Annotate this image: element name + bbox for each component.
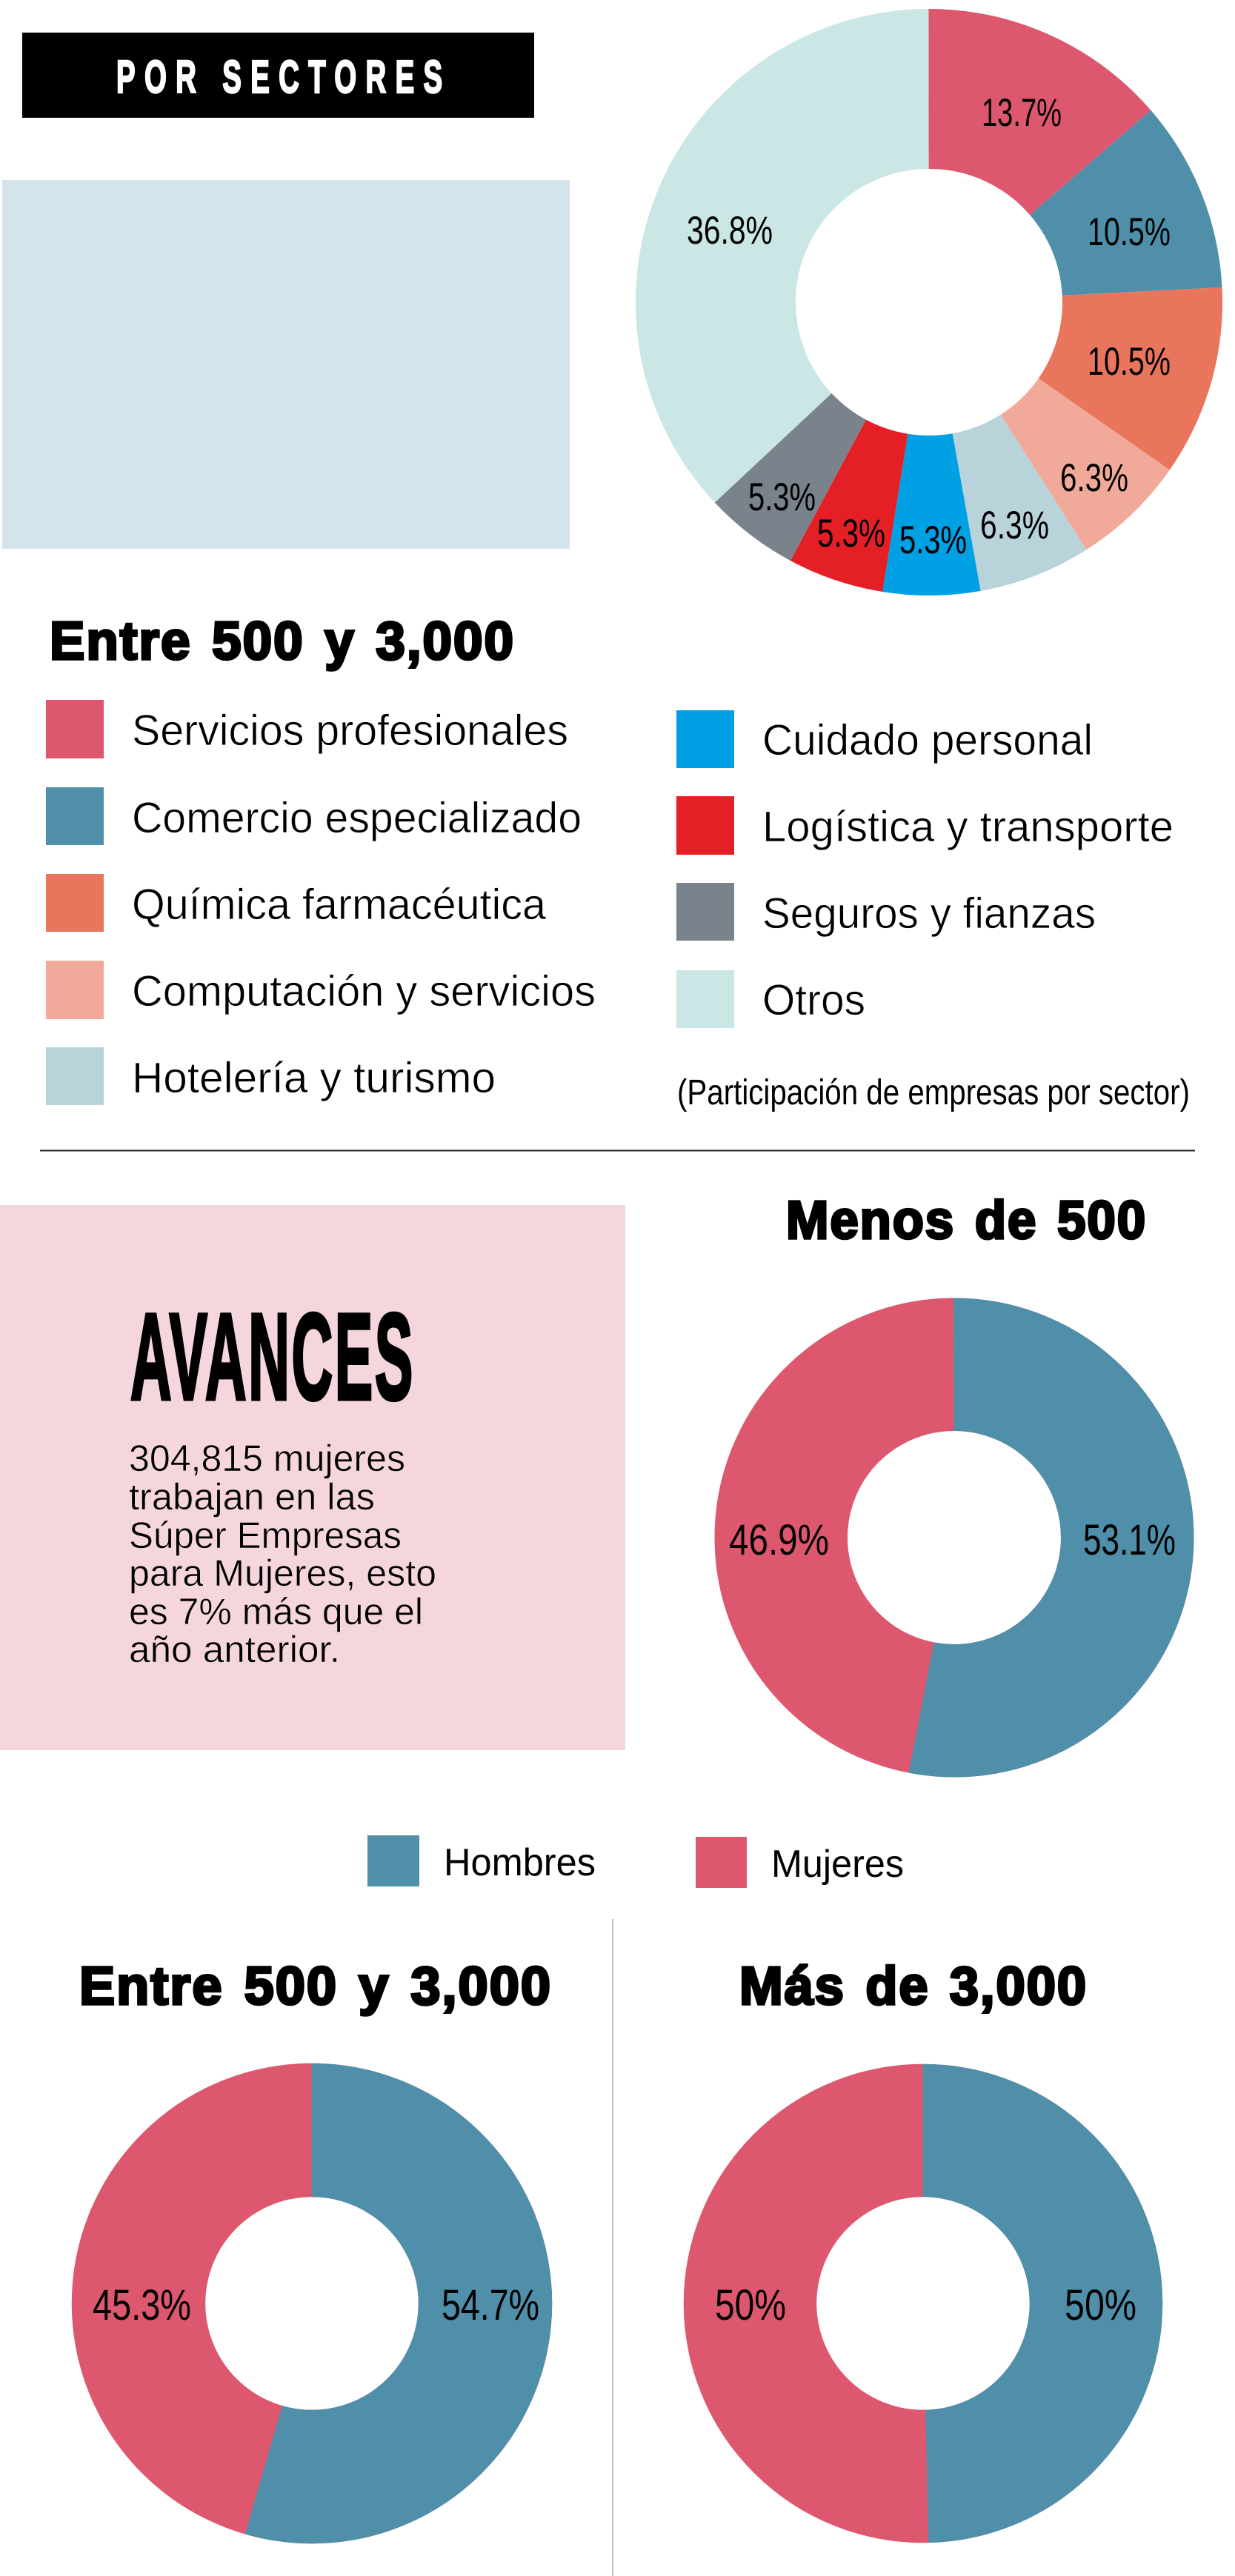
donut chart: Entre 500 y 3,000 xyxy=(93,2130,539,2477)
legend: sectors: Cuidado personal xyxy=(762,716,1093,764)
donut chart: sector share: 5.3% xyxy=(817,512,885,555)
panel: light blue placeholder xyxy=(2,180,570,549)
donut chart: sector share: 6.3% xyxy=(1060,456,1128,500)
donut chart: Más de 3,000 xyxy=(715,2130,1136,2477)
legend: sectors: Logística y transporte xyxy=(762,803,1174,851)
panel: Avances xyxy=(0,1205,625,1750)
title banner: Por sectores: POR SECTORES xyxy=(116,51,442,102)
donut chart: sector share: 10.5% xyxy=(1088,210,1171,254)
legend: sectors: Química farmacéutica xyxy=(132,881,547,929)
legend: sectors: Seguros y fianzas xyxy=(762,890,1096,938)
donut chart: sector share: 5.3% xyxy=(899,518,967,562)
heading: Entre 500 y 3,000 (sectors): Entre 500 y 3,000 xyxy=(50,612,515,671)
legend: sectors: Hotelería y turismo xyxy=(132,1054,496,1102)
text block: Avances body: Súper Empresas xyxy=(129,1515,402,1556)
legend: sectors: Servicios profesionales xyxy=(132,707,568,755)
legend: sectors xyxy=(46,700,1174,1105)
text block: Avances body xyxy=(129,1438,436,1670)
donut chart: sector share: 6.3% xyxy=(980,504,1049,547)
donut chart: Entre 500 y 3,000: 54.7% xyxy=(442,2281,539,2329)
legend: gender: Hombres xyxy=(444,1841,596,1884)
donut chart: sector share: 13.7% xyxy=(982,91,1062,135)
donut chart: Más de 3,000: 50% xyxy=(715,2281,786,2329)
legend: sectors: Otros xyxy=(762,976,865,1024)
legend: gender xyxy=(367,1835,904,1888)
legend: gender: Mujeres xyxy=(771,1843,904,1886)
title banner: Por sectores xyxy=(22,33,534,118)
donut chart: sector share: 36.8% xyxy=(687,209,773,253)
text block: Avances body: es 7% más que el xyxy=(129,1591,423,1632)
legend: sectors: Computación y servicios xyxy=(132,967,596,1015)
panel: Avances: AVANCES xyxy=(130,1289,415,1426)
donut chart: sector share: 10.5% xyxy=(1088,340,1171,384)
donut chart: Más de 3,000: 50% xyxy=(1065,2281,1136,2329)
donut chart: Entre 500 y 3,000: 45.3% xyxy=(93,2281,191,2329)
donut chart: sector share xyxy=(687,89,1171,562)
text block: Avances body: año anterior. xyxy=(129,1629,340,1670)
text block: Avances body: para Mujeres, esto xyxy=(129,1552,436,1594)
donut chart: Menos de 500: 46.9% xyxy=(729,1516,829,1564)
donut chart: sector share: 5.3% xyxy=(748,476,816,519)
text block: Avances body: 304,815 mujeres xyxy=(129,1438,405,1479)
donut chart: Menos de 500: 53.1% xyxy=(1083,1516,1176,1564)
heading: Más de 3,000: Más de 3,000 xyxy=(739,1957,1088,2016)
legend: sectors: Comercio especializado xyxy=(132,794,582,842)
heading: Menos de 500: Menos de 500 xyxy=(786,1191,1147,1250)
heading: Entre 500 y 3,000 (gender): Entre 500 y 3,000 xyxy=(79,1957,552,2016)
text block: Avances body: trabajan en las xyxy=(129,1476,375,1518)
donut chart: Menos de 500 xyxy=(729,1364,1176,1711)
